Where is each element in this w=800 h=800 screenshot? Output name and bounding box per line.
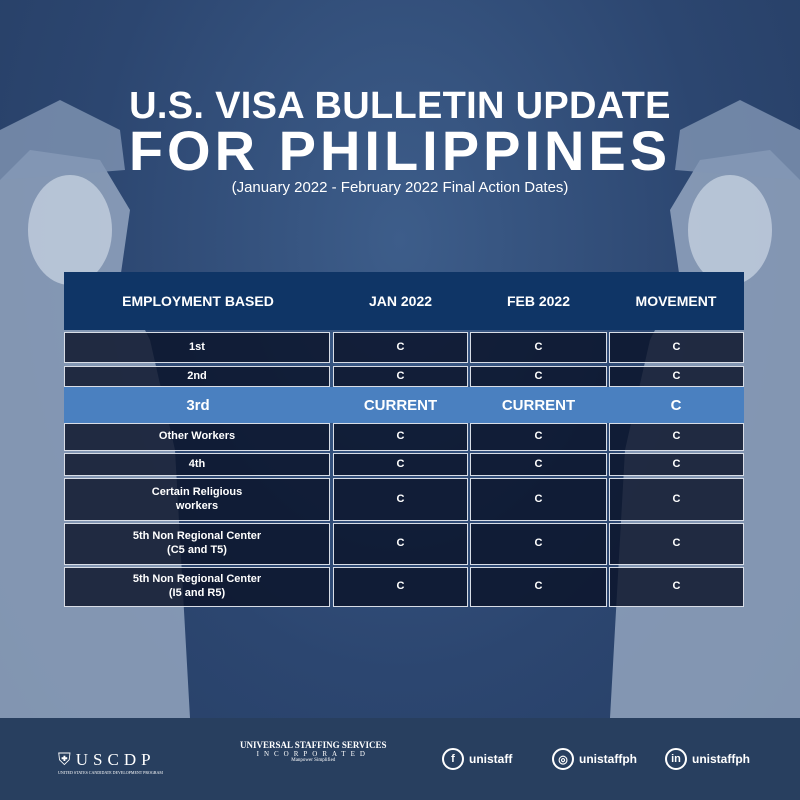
table: C xyxy=(397,458,404,470)
row 5th I5 xyxy=(64,567,744,607)
table: C xyxy=(535,580,542,592)
logo universal staffing: UNIVERSAL STAFFING SERVICES xyxy=(240,740,387,750)
table header: JAN 2022 xyxy=(369,293,432,309)
logo universal staffing: Manpower Simplified xyxy=(291,758,335,763)
subtitle: (January 2022 - February 2022 Final Action Dates) xyxy=(232,179,568,196)
row other workers xyxy=(64,423,744,451)
table header: EMPLOYMENT BASED xyxy=(122,293,274,309)
table: 5th Non Regional Center xyxy=(133,573,261,585)
table: C xyxy=(535,458,542,470)
row 3rd highlight: CURRENT xyxy=(502,396,575,414)
table: C xyxy=(535,370,542,382)
table: C xyxy=(535,537,542,549)
row 4th xyxy=(64,453,744,476)
row 3rd highlight xyxy=(64,387,744,423)
table header: MOVEMENT xyxy=(636,293,716,309)
table: workers xyxy=(176,500,218,512)
row 5th C5 xyxy=(64,523,744,565)
table: C xyxy=(673,458,680,470)
social facebook: unistaff xyxy=(469,752,512,766)
table: C xyxy=(673,580,680,592)
table: C xyxy=(535,493,542,505)
table: Certain Religious xyxy=(152,486,242,498)
logo USCDP: UNITED STATES CANDIDATE DEVELOPMENT PROGRAM xyxy=(58,770,163,775)
row 2nd xyxy=(64,366,744,387)
table header: FEB 2022 xyxy=(507,293,570,309)
row 3rd highlight: C xyxy=(671,396,681,414)
table header xyxy=(64,272,744,330)
table: C xyxy=(535,430,542,442)
social linkedin: unistaffph xyxy=(692,752,750,766)
table: (I5 and R5) xyxy=(169,587,225,599)
social linkedin xyxy=(665,748,750,770)
logo universal staffing xyxy=(240,740,387,763)
table xyxy=(64,272,744,607)
table: C xyxy=(397,341,404,353)
table: 5th Non Regional Center xyxy=(133,530,261,542)
table: C xyxy=(673,493,680,505)
row 1st xyxy=(64,332,744,363)
table: C xyxy=(397,537,404,549)
table: C xyxy=(397,580,404,592)
social instagram xyxy=(552,748,637,770)
statue right xyxy=(610,100,800,718)
social linkedin: in xyxy=(671,753,681,765)
table: C xyxy=(673,430,680,442)
logo universal staffing: INCORPORATED xyxy=(257,750,370,758)
title: U.S. VISA BULLETIN UPDATE xyxy=(129,85,671,127)
social instagram: ◎ xyxy=(558,754,568,766)
table: C xyxy=(397,493,404,505)
statue left xyxy=(0,100,190,718)
logo USCDP: ⛨USCDP xyxy=(58,750,156,769)
title: FOR PHILIPPINES xyxy=(129,119,671,182)
table: Other Workers xyxy=(159,430,235,442)
table: C xyxy=(673,370,680,382)
row 3rd highlight: CURRENT xyxy=(364,396,437,414)
row 3rd highlight: 3rd xyxy=(186,396,210,414)
title xyxy=(129,85,671,182)
table: 2nd xyxy=(187,370,207,382)
social facebook: f xyxy=(451,753,455,765)
table: C xyxy=(397,370,404,382)
social facebook xyxy=(442,748,512,770)
table: C xyxy=(673,341,680,353)
table: C xyxy=(397,430,404,442)
social instagram: unistaffph xyxy=(579,752,637,766)
table: C xyxy=(535,341,542,353)
table: 1st xyxy=(189,341,205,353)
table: (C5 and T5) xyxy=(167,544,227,556)
footer xyxy=(0,718,800,800)
row religious xyxy=(64,478,744,521)
table: 4th xyxy=(189,458,205,470)
table: C xyxy=(673,537,680,549)
